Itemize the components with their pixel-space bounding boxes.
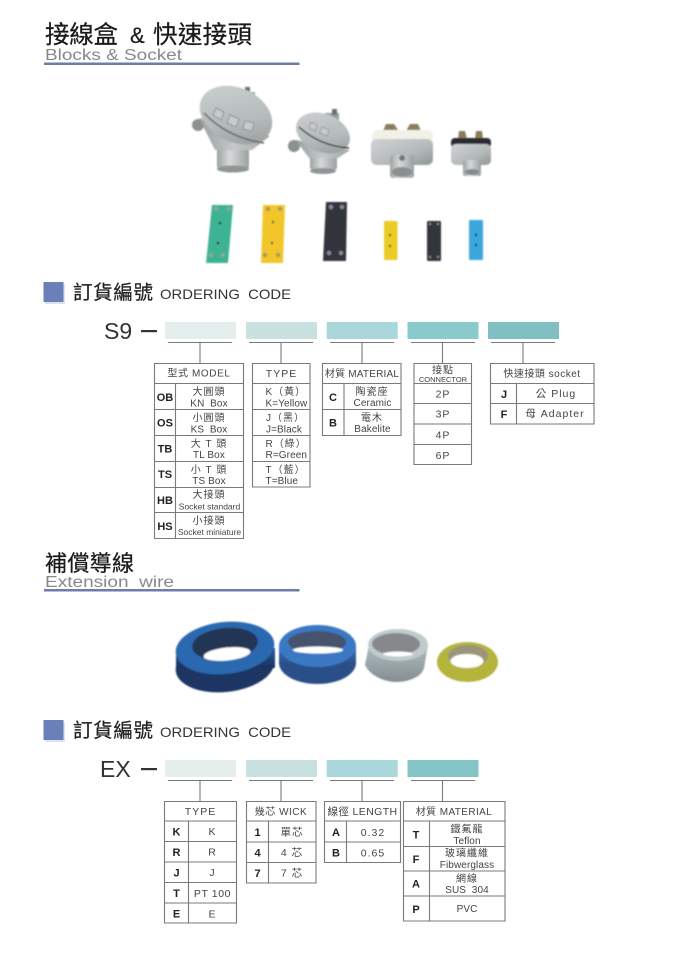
icon: grey coil bbox=[365, 629, 428, 682]
table: socket: F bbox=[501, 409, 508, 421]
S9 code prefix bbox=[104, 318, 157, 344]
table: socket: 母 Adapter bbox=[525, 408, 585, 420]
icon: small black socket bbox=[427, 221, 441, 261]
table: type: T=Blue bbox=[266, 476, 298, 487]
table: EX type: T bbox=[173, 888, 180, 900]
table: EX type: R bbox=[208, 846, 217, 858]
table: EX material: PVC bbox=[457, 904, 477, 915]
table: connector bbox=[414, 364, 472, 464]
title: blocks and socket: 接線盒 bbox=[45, 21, 118, 49]
table: material: Bakelite bbox=[354, 424, 391, 435]
heading: ordering code EX: ORDERING CODE bbox=[160, 724, 291, 740]
table: EX length: B bbox=[332, 848, 340, 860]
table: type: T（藍） bbox=[266, 463, 306, 476]
table: EX type: J bbox=[173, 868, 180, 880]
product photos: junction heads bbox=[190, 74, 491, 178]
table: EX length bbox=[324, 802, 400, 862]
table: EX material: T bbox=[413, 830, 420, 842]
table: connector: CONNECTOR bbox=[419, 375, 468, 384]
title: extension wire: 補償導線 bbox=[45, 551, 134, 576]
table: material: 材質 MATERIAL bbox=[325, 367, 399, 380]
table: model: 小接頭 bbox=[192, 514, 226, 527]
heading: ordering code S9 bbox=[44, 282, 291, 304]
table: EX wick: 4 bbox=[254, 848, 261, 860]
EX code prefix bbox=[100, 756, 157, 782]
table: type: R（綠） bbox=[266, 437, 307, 450]
table: model: 小圓頭 bbox=[192, 412, 226, 424]
table: model: OB bbox=[157, 392, 173, 404]
table: model: 大接頭 bbox=[192, 488, 226, 501]
table: EX type: E bbox=[173, 908, 180, 920]
product photos: wire coils bbox=[173, 617, 498, 697]
table: EX wick bbox=[246, 802, 316, 883]
table: model: Socket standard bbox=[179, 502, 240, 512]
table: EX type: K bbox=[208, 826, 217, 838]
table: EX material: 網線 bbox=[456, 872, 478, 885]
icon: yellow coil bbox=[437, 642, 498, 682]
table: model: TL Box bbox=[193, 450, 225, 461]
table: socket: 快速接頭 socket bbox=[503, 367, 581, 380]
table: model: TB bbox=[158, 444, 172, 456]
code slots S9 bbox=[165, 322, 559, 363]
title: blocks and socket: & bbox=[130, 23, 145, 48]
table: socket: J bbox=[501, 389, 507, 401]
table: EX material: SUS 304 bbox=[445, 885, 489, 896]
table: EX type: E bbox=[208, 908, 217, 920]
table: model: TS Box bbox=[192, 476, 226, 487]
heading: ordering code S9: ORDERING CODE bbox=[160, 286, 291, 302]
icon: small T head bbox=[451, 131, 491, 176]
table: EX type: J bbox=[209, 867, 216, 879]
table: model: 大圓頭 bbox=[192, 385, 226, 398]
table: EX material: Fibwerglass bbox=[440, 860, 494, 871]
table: model bbox=[154, 364, 244, 538]
table: model: 小 T 頭 bbox=[191, 464, 227, 476]
table: model: 型式 MODEL bbox=[167, 366, 231, 380]
table: connector: 6P bbox=[436, 450, 450, 462]
table: type: R=Green bbox=[266, 450, 307, 461]
title: blocks and socket: 快速接頭 bbox=[153, 21, 252, 49]
icon: green socket bbox=[206, 205, 233, 263]
table: type: K（黃） bbox=[266, 385, 306, 398]
table: type: J=Black bbox=[266, 424, 303, 436]
table: model: KS Box bbox=[191, 424, 227, 436]
table: EX material: 材質 MATERIAL bbox=[416, 805, 492, 818]
table: EX type: TYPE bbox=[185, 806, 216, 818]
table: EX material: P bbox=[412, 904, 420, 916]
title: blocks and socket: Blocks & Socket bbox=[45, 47, 183, 64]
table: material bbox=[322, 364, 401, 436]
table: socket: 公 Plug bbox=[536, 388, 576, 400]
heading: ordering code EX bbox=[44, 720, 291, 742]
table: EX material: 玻璃纖維 bbox=[445, 846, 489, 860]
heading: ordering code EX: 訂貨編號 bbox=[73, 720, 153, 742]
table: EX length: 線徑 LENGTH bbox=[327, 805, 398, 818]
table: connector: 2P bbox=[436, 388, 450, 400]
table: type: TYPE bbox=[266, 368, 297, 380]
table: model: HS bbox=[157, 521, 173, 533]
table: EX material: A bbox=[412, 878, 420, 890]
table: model: Socket miniature bbox=[178, 527, 241, 537]
title: blocks and socket bbox=[44, 21, 300, 65]
table: socket bbox=[490, 364, 594, 424]
table: model: OS bbox=[157, 418, 173, 430]
table: EX wick: 4 芯 bbox=[281, 847, 303, 859]
icon: large blue coil bbox=[173, 617, 277, 697]
icon: yellow socket bbox=[261, 205, 285, 263]
table: EX wick: 7 芯 bbox=[281, 868, 303, 880]
icon: large round head bbox=[190, 74, 282, 172]
icon: blue socket bbox=[469, 220, 483, 260]
table: EX material: Teflon bbox=[453, 836, 481, 847]
EX code prefix: EX bbox=[100, 756, 131, 782]
table: type: J（黑） bbox=[266, 412, 305, 424]
code slots EX bbox=[165, 760, 478, 801]
table: EX wick: 1 bbox=[254, 827, 261, 839]
table: EX length: A bbox=[332, 827, 340, 839]
table: model: TS bbox=[158, 469, 172, 481]
icon: large T head bbox=[371, 124, 433, 178]
table: material: 電木 bbox=[361, 412, 383, 424]
table: EX length: 0.65 bbox=[361, 848, 385, 860]
icon: blue coil bbox=[279, 625, 356, 684]
table: EX type: PT 100 bbox=[194, 888, 231, 900]
table: EX type: K bbox=[173, 826, 181, 838]
table: material: C bbox=[329, 392, 337, 404]
table: EX material bbox=[404, 802, 505, 921]
table: connector: 3P bbox=[436, 408, 450, 420]
table: model: HB bbox=[157, 495, 173, 507]
S9 code prefix: S9 bbox=[104, 318, 132, 344]
table: connector: 接點 bbox=[432, 364, 454, 376]
title: extension wire: Extension wire bbox=[45, 574, 174, 591]
table: material: B bbox=[329, 418, 337, 430]
table: EX wick: 單芯 bbox=[280, 826, 304, 838]
icon: small yellow socket bbox=[384, 221, 398, 260]
title: extension wire bbox=[44, 551, 300, 592]
table: EX type bbox=[164, 802, 236, 923]
table: model: 大 T 頭 bbox=[191, 437, 227, 450]
table: EX length: 0.32 bbox=[361, 827, 385, 839]
heading: ordering code S9: 訂貨編號 bbox=[73, 282, 153, 304]
table: material: 陶瓷座 bbox=[356, 385, 388, 398]
icon: black socket bbox=[323, 202, 347, 261]
table: EX type: R bbox=[173, 847, 181, 859]
table: type bbox=[252, 364, 310, 487]
table: EX wick: 7 bbox=[254, 868, 261, 880]
table: EX material: 鐵氟龍 bbox=[450, 822, 484, 836]
icon: small round head bbox=[288, 105, 356, 174]
table: connector: 4P bbox=[436, 430, 450, 442]
product photos: sockets bbox=[206, 202, 483, 263]
table: model: KN Box bbox=[190, 398, 228, 410]
table: type: K=Yellow bbox=[266, 398, 308, 410]
table: EX material: F bbox=[413, 854, 420, 866]
table: EX wick: 幾芯 WICK bbox=[255, 805, 307, 818]
table: material: Ceramic bbox=[354, 398, 391, 409]
